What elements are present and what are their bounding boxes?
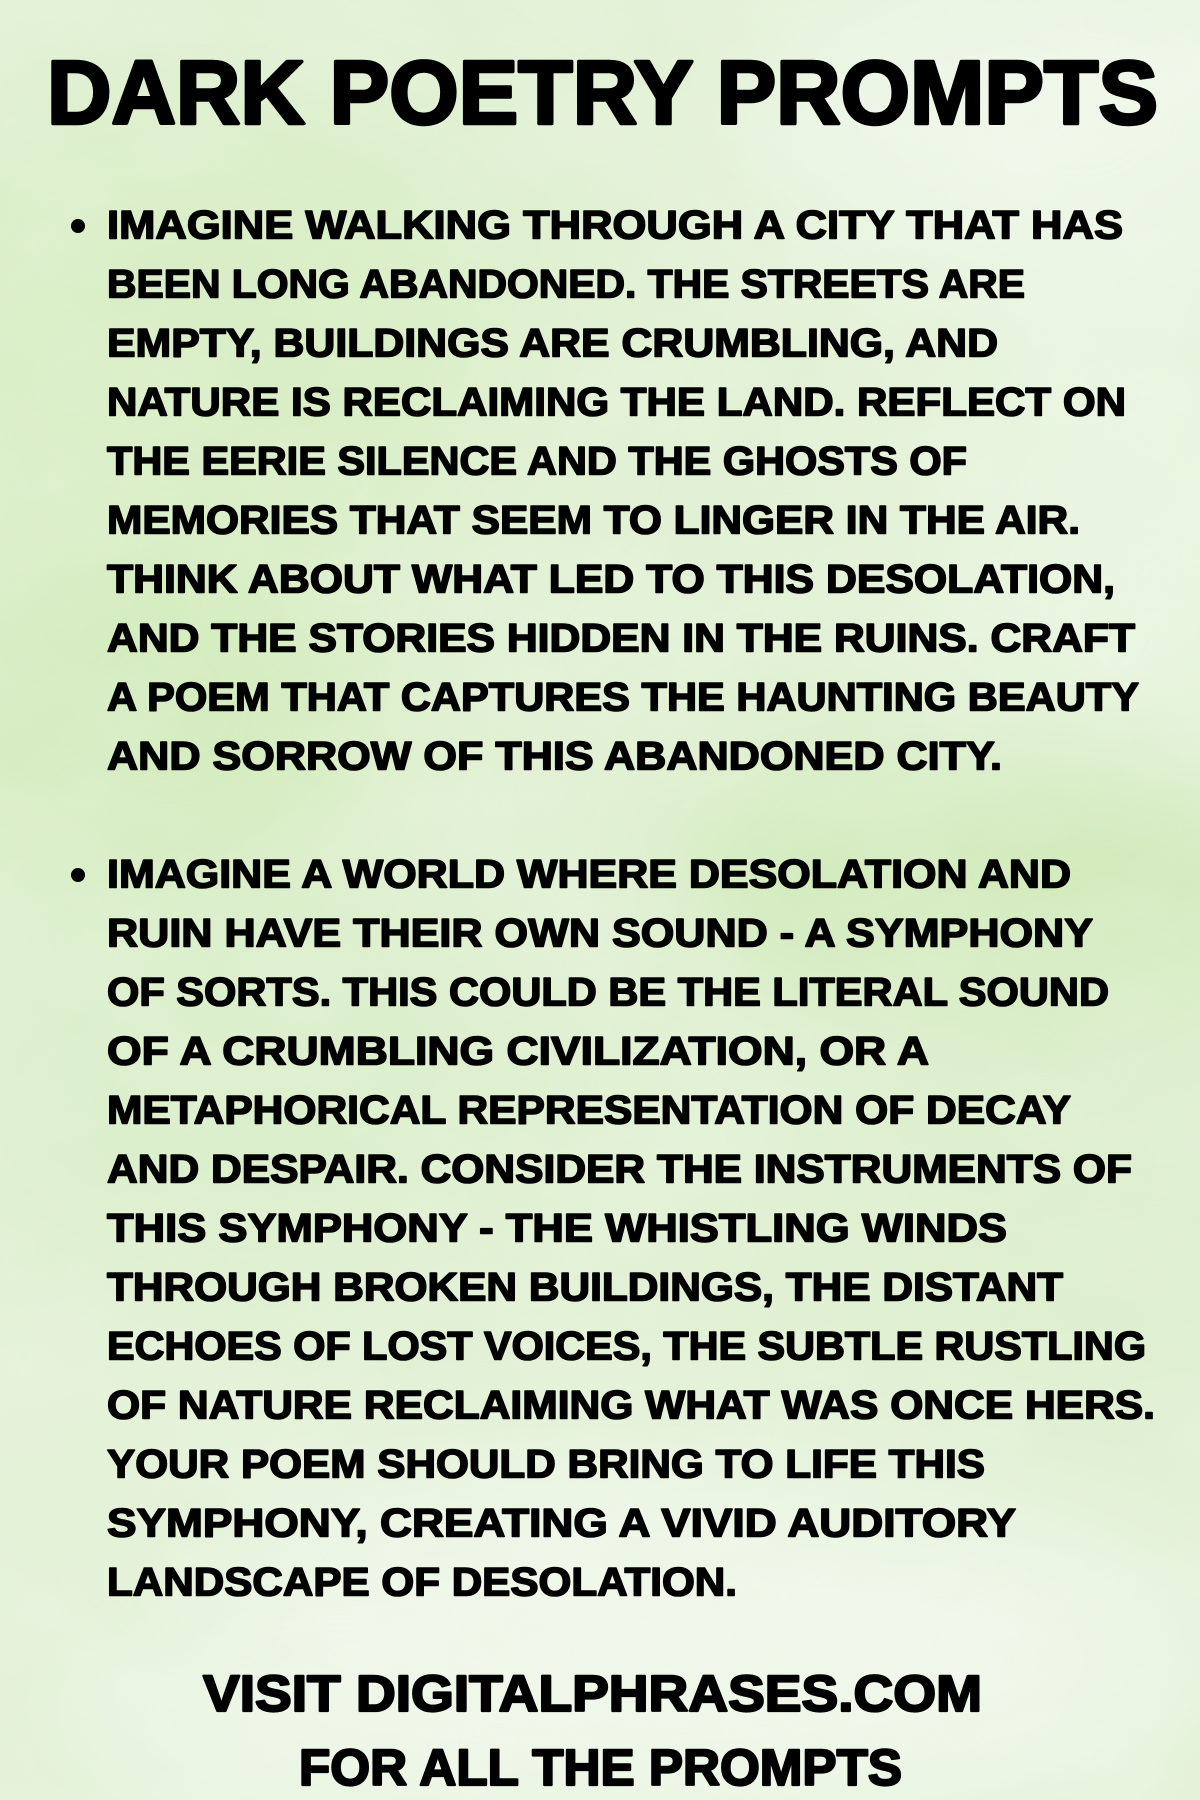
text block: first prompt: THE EERIE SILENCE AND THE GHOSTS OF <box>107 440 967 484</box>
text block: second prompt: OF SORTS. THIS COULD BE THE LITERAL SOUND <box>107 970 1109 1014</box>
text block: second prompt: AND DESPAIR. CONSIDER THE INSTRUMENTS OF <box>107 1148 1132 1192</box>
text block: first prompt: IMAGINE WALKING THROUGH A CITY THAT HAS <box>107 204 1123 248</box>
text block: second prompt: RUIN HAVE THEIR OWN SOUND - A SYMPHONY <box>107 912 1093 956</box>
text block: second prompt: SYMPHONY, CREATING A VIVID AUDITORY <box>107 1502 1016 1546</box>
text block: second prompt: THROUGH BROKEN BUILDINGS, THE DISTANT <box>107 1266 1063 1310</box>
text block: second prompt: IMAGINE A WORLD WHERE DESOLATION AND <box>107 852 1071 896</box>
text block: first prompt: A POEM THAT CAPTURES THE HAUNTING BEAUTY <box>107 676 1139 720</box>
text block: second prompt: YOUR POEM SHOULD BRING TO LIFE THIS <box>107 1442 985 1486</box>
text block: first prompt: AND SORROW OF THIS ABANDONED CITY. <box>107 734 1002 778</box>
footer call to action: VISIT DIGITALPHRASES.COM <box>203 1665 982 1722</box>
text block: second prompt <box>107 852 1155 1604</box>
text block: first prompt: NATURE IS RECLAIMING THE LAND. REFLECT ON <box>107 380 1126 424</box>
text block: second prompt: OF NATURE RECLAIMING WHAT WAS ONCE HERS. <box>107 1384 1155 1428</box>
panel: first prompt <box>71 204 1139 778</box>
text block: first prompt <box>107 204 1139 778</box>
text block: second prompt: OF A CRUMBLING CIVILIZATION, OR A <box>107 1030 929 1074</box>
text block: second prompt: LANDSCAPE OF DESOLATION. <box>107 1560 737 1604</box>
text block: second prompt: METAPHORICAL REPRESENTATION OF DECAY <box>107 1088 1071 1132</box>
text block: first prompt: AND THE STORIES HIDDEN IN THE RUINS. CRAFT <box>107 616 1135 660</box>
text block: first prompt: BEEN LONG ABANDONED. THE STREETS ARE <box>107 262 1025 306</box>
footer call to action <box>203 1665 982 1796</box>
text block: second prompt: ECHOES OF LOST VOICES, THE SUBTLE RUSTLING <box>107 1324 1146 1368</box>
bullet: second prompt <box>71 868 85 882</box>
text block: first prompt: EMPTY, BUILDINGS ARE CRUMBLING, AND <box>107 322 998 366</box>
bullet: first prompt <box>71 219 85 233</box>
text block: first prompt: MEMORIES THAT SEEM TO LINGER IN THE AIR. <box>107 498 1080 542</box>
footer call to action: FOR ALL THE PROMPTS <box>299 1739 902 1796</box>
panel: second prompt <box>71 852 1155 1604</box>
title: DARK POETRY PROMPTS <box>47 44 1158 144</box>
text block: second prompt: THIS SYMPHONY - THE WHISTLING WINDS <box>107 1206 1007 1250</box>
text block: first prompt: THINK ABOUT WHAT LED TO THIS DESOLATION, <box>107 558 1115 602</box>
